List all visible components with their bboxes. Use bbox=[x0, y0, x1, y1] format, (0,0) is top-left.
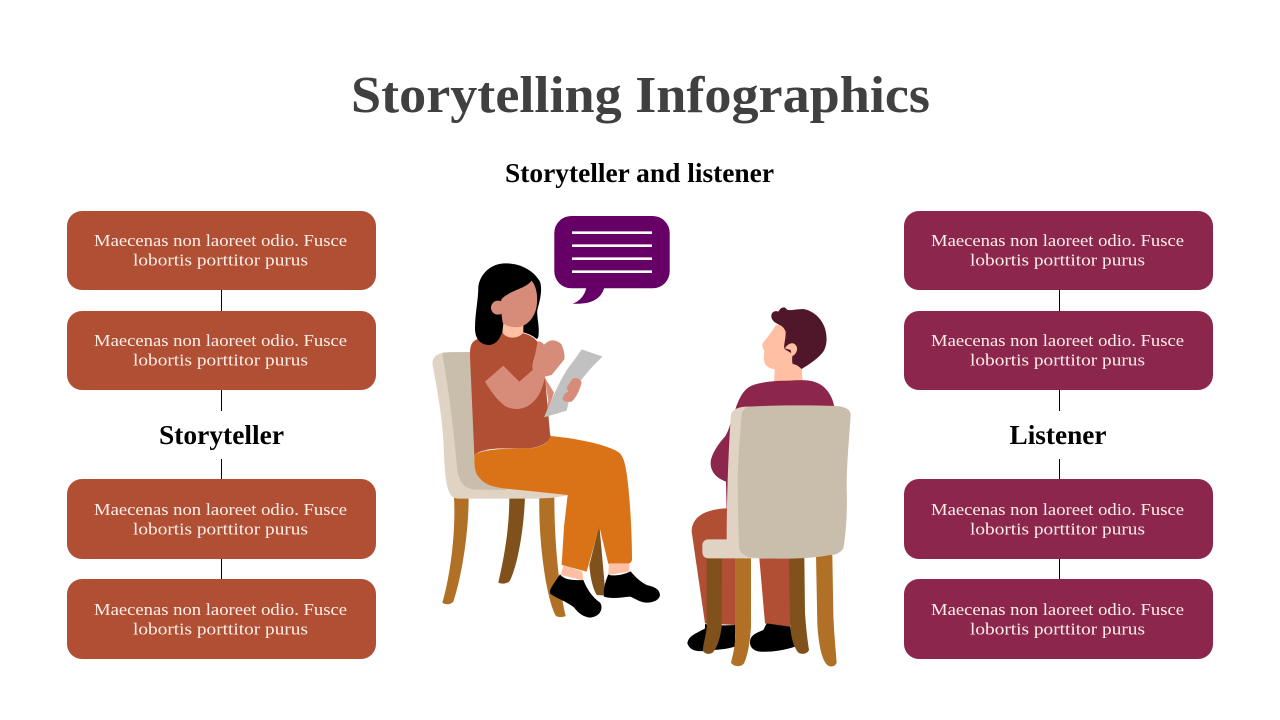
storyteller box 3: lobortis porttitor purus bbox=[133, 520, 308, 538]
listener heading: Listener bbox=[1010, 420, 1107, 450]
listener box 1: lobortis porttitor purus bbox=[970, 250, 1145, 270]
storyteller box 2 bbox=[67, 311, 376, 390]
listener box 4 bbox=[904, 579, 1213, 659]
man's shoes bbox=[687, 623, 795, 652]
woman's hair bbox=[475, 263, 541, 345]
man's face bbox=[762, 325, 802, 370]
woman's face bbox=[501, 281, 537, 327]
man's trousers bbox=[692, 508, 790, 627]
woman's ear bbox=[491, 301, 505, 315]
listener box 2 bbox=[904, 311, 1213, 390]
woman's shoes bbox=[550, 571, 660, 618]
storyteller box 2: Maecenas non laoreet odio. Fusce bbox=[94, 331, 347, 350]
title: Storytelling Infographics bbox=[351, 67, 930, 124]
listener box 4: lobortis porttitor purus bbox=[970, 620, 1145, 638]
storyteller box 4: Maecenas non laoreet odio. Fusce bbox=[94, 600, 347, 619]
storyteller box 3 bbox=[67, 479, 376, 559]
storyteller box 3: Maecenas non laoreet odio. Fusce bbox=[94, 500, 347, 519]
woman's socks bbox=[561, 563, 629, 581]
woman's trousers bbox=[474, 436, 632, 572]
man's ear bbox=[785, 343, 797, 356]
storyteller box 4 bbox=[67, 579, 376, 659]
woman's far arm bbox=[544, 377, 554, 413]
storyteller heading: Storyteller bbox=[159, 420, 284, 450]
illustration: listener man on chair bbox=[687, 307, 851, 666]
paper bbox=[544, 349, 603, 417]
listener box 2: Maecenas non laoreet odio. Fusce bbox=[931, 331, 1184, 350]
storyteller box 2: lobortis porttitor purus bbox=[133, 350, 308, 370]
listener box 3 bbox=[904, 479, 1213, 559]
woman's raised arm bbox=[485, 340, 565, 409]
listener box 1 bbox=[904, 211, 1213, 290]
man's neck bbox=[774, 367, 803, 382]
subtitle: Storyteller and listener bbox=[505, 158, 774, 188]
listener box 2: lobortis porttitor purus bbox=[970, 350, 1145, 370]
listener box 3: Maecenas non laoreet odio. Fusce bbox=[931, 500, 1184, 519]
storyteller box 1: Maecenas non laoreet odio. Fusce bbox=[94, 231, 347, 250]
panel: storyteller column bbox=[67, 211, 376, 659]
man's sweater bbox=[711, 380, 834, 513]
listener box 1: Maecenas non laoreet odio. Fusce bbox=[931, 231, 1184, 250]
storyteller box 1: lobortis porttitor purus bbox=[133, 250, 308, 270]
woman's torso bbox=[470, 332, 551, 455]
listener box 3: lobortis porttitor purus bbox=[970, 520, 1145, 538]
man's hair bbox=[771, 307, 827, 369]
illustration: storyteller woman on chair bbox=[432, 263, 660, 618]
woman's chair bbox=[432, 352, 606, 617]
icon: speech bubble bbox=[554, 216, 670, 304]
storyteller box 4: lobortis porttitor purus bbox=[133, 620, 308, 638]
woman's hand holding paper bbox=[563, 378, 582, 402]
man's chair bbox=[702, 405, 851, 666]
listener box 4: Maecenas non laoreet odio. Fusce bbox=[931, 600, 1184, 619]
woman's neck bbox=[502, 323, 523, 338]
storyteller box 1 bbox=[67, 211, 376, 290]
panel: listener column bbox=[904, 211, 1213, 659]
